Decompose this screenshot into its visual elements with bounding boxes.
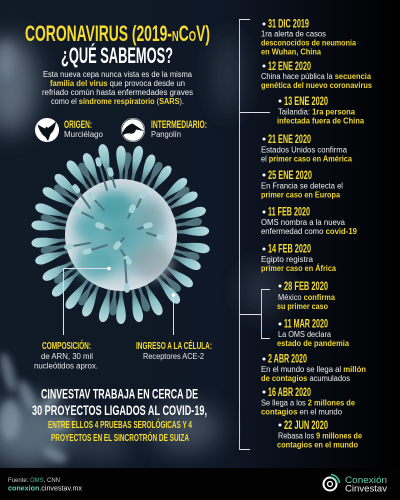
timeline: 22 JUN 2020: Rebasa los 9 millones de (278, 432, 362, 440)
sphere shading (74, 192, 173, 280)
timeline: 2 ABR 2020: de contagios acumulados (261, 374, 350, 383)
timeline: 25 ENE 2020: primer caso en Europa (261, 190, 340, 200)
blurred glow: right side (214, 35, 284, 316)
cell entry label: Receptores ACE-2 (143, 352, 204, 361)
intro paragraph: como el síndrome respiratorio (SARS). (51, 97, 184, 106)
timeline: 14 FEB 2020: Egipto registra (261, 255, 314, 264)
logo: Conexión Cinvestav (324, 474, 388, 494)
timeline: 28 FEB 2020: 28 FEB 2020 (284, 281, 328, 293)
timeline: 11 MAR 2020 (277, 318, 350, 348)
Cinvestav statement: 30 PROYECTOS LIGADOS AL COVID-19, (32, 402, 207, 418)
timeline: 2 ABR 2020: En el mundo se llega al millón (261, 365, 366, 374)
logo: Conexión Cinvestav: Conexión (345, 475, 387, 485)
timeline: 21 ENE 2020: el primer caso en América (261, 154, 352, 164)
timeline: 13 ENE 2020: Tailandia: 1ra persona (278, 108, 356, 116)
leader line: cell entry (172, 293, 175, 335)
timeline: 16 ABR 2020: contagios en el mundo (261, 408, 343, 416)
composition label: nucleótidos aprox. (34, 362, 98, 370)
timeline: 11 FEB 2020: enfermedad como covid-19 (261, 227, 358, 236)
leader line: composition (64, 267, 111, 335)
timeline: 11 MAR 2020: 11 MAR 2020 (284, 318, 328, 330)
timeline: 12 ENE 2020: 12 ENE 2020 (268, 61, 311, 73)
footer band (0, 468, 400, 500)
timeline: 16 ABR 2020 (261, 387, 356, 416)
composition label (34, 339, 98, 370)
timeline: 21 ENE 2020 (261, 134, 352, 164)
back spikes (40, 152, 203, 316)
virus illustration (31, 143, 210, 324)
timeline: 25 ENE 2020: 25 ENE 2020 (268, 170, 312, 182)
icon: bat (35, 118, 59, 142)
blurred virus: bottom left (0, 351, 221, 466)
timeline: 31 DIC 2019 (261, 18, 356, 56)
timeline: 11 FEB 2020 (261, 206, 358, 236)
intro paragraph: Esta nueva cepa nunca vista es de la misma (43, 70, 193, 79)
sphere (65, 179, 177, 291)
intermediary: pangolin: Pangolín (151, 130, 181, 139)
composition label: COMPOSICIÓN: (42, 339, 91, 352)
title (25, 21, 210, 68)
timeline: 12 ENE 2020 (261, 61, 372, 90)
intro paragraph (42, 70, 193, 106)
source (8, 477, 82, 492)
timeline: 11 MAR 2020: La OMS declara (278, 330, 331, 339)
timeline: 22 JUN 2020: contagios en el mundo (277, 440, 358, 450)
timeline: 2 ABR 2020: 2 ABR 2020 (268, 354, 307, 366)
timeline: 12 ENE 2020: China hace pública la secuencia (261, 72, 372, 81)
timeline brackets (240, 20, 270, 450)
timeline: 28 FEB 2020 (277, 281, 336, 311)
timeline: 11 MAR 2020: estado de pandemia (277, 339, 350, 348)
timeline: 12 ENE 2020: genética del nuevo coronavirus (261, 81, 372, 90)
timeline: 31 DIC 2019: en Wuhan, China (261, 48, 322, 56)
timeline: 14 FEB 2020: 14 FEB 2020 (268, 244, 311, 256)
timeline: 31 DIC 2019: desconocidos de neumonia (261, 38, 356, 48)
timeline: 31 DIC 2019: 1ra alerta de casos (261, 30, 326, 38)
origin: bat: Murciélago (64, 130, 104, 139)
origin: bat (35, 118, 104, 142)
Cinvestav statement: ENTRE ELLOS 4 PRUEBAS SEROLÓGICAS Y 4 (48, 418, 192, 431)
Cinvestav statement: CINVESTAV TRABAJA EN CERCA DE (41, 386, 198, 402)
timeline: 31 DIC 2019: 31 DIC 2019 (268, 18, 309, 30)
front spikes (67, 160, 163, 290)
timeline: 11 FEB 2020: 11 FEB 2020 (268, 206, 310, 218)
outer spikes (31, 143, 210, 324)
blurred virus: top left (0, 37, 36, 133)
intro paragraph: refriado común hasta enfermedades graves (42, 88, 193, 97)
source: conexion.cinvestav.mx (8, 484, 82, 492)
origin: bat: ORIGEN: (64, 119, 92, 131)
intermediary: pangolin (121, 118, 207, 142)
title: ¿QUÉ SABEMOS? (61, 43, 173, 68)
timeline: 14 FEB 2020 (261, 244, 337, 273)
logo: Conexión Cinvestav: Cinvestav (345, 484, 388, 494)
intro paragraph: familia del virus que provoca desde un (50, 79, 185, 88)
timeline: 13 ENE 2020: 13 ENE 2020 (284, 96, 328, 108)
timeline: 16 ABR 2020: Se llega a los 2 millones de (261, 398, 356, 408)
cell entry label: INGRESO A LA CÉLULA: (136, 339, 212, 352)
Cinvestav statement (32, 386, 207, 444)
source: Fuente: OMS, CNN (8, 477, 60, 484)
icon: pangolin (121, 118, 145, 142)
timeline: 25 ENE 2020: En Francia se detecta el (261, 182, 343, 190)
timeline: 14 FEB 2020: primer caso en África (261, 264, 337, 273)
Cinvestav statement: PROYECTOS EN EL SINCROTRÓN DE SUIZA (51, 431, 189, 444)
timeline: 21 ENE 2020: Estados Unidos confirma (261, 146, 348, 154)
timeline: 28 FEB 2020: México confirma (278, 293, 336, 302)
timeline: 13 ENE 2020 (277, 96, 365, 126)
timeline: 13 ENE 2020: infectada fuera de China (277, 116, 365, 126)
timeline: 22 JUN 2020 (277, 420, 362, 450)
timeline: 25 ENE 2020 (261, 170, 343, 200)
timeline: 16 ABR 2020: 16 ABR 2020 (268, 387, 311, 399)
timeline: 28 FEB 2020: su primer caso (277, 302, 328, 311)
intermediary: pangolin: INTERMEDIARIO: (151, 119, 207, 131)
cell entry label (136, 339, 212, 361)
timeline: 22 JUN 2020: 22 JUN 2020 (284, 420, 328, 432)
timeline: 21 ENE 2020: 21 ENE 2020 (268, 134, 311, 146)
timeline: 2 ABR 2020 (261, 354, 366, 383)
composition label: de ARN, 30 mil (41, 352, 93, 361)
title: CORONAVIRUS (2019-NCOV) (25, 21, 210, 46)
timeline: 11 FEB 2020: OMS nombra a la nueva (261, 218, 346, 227)
